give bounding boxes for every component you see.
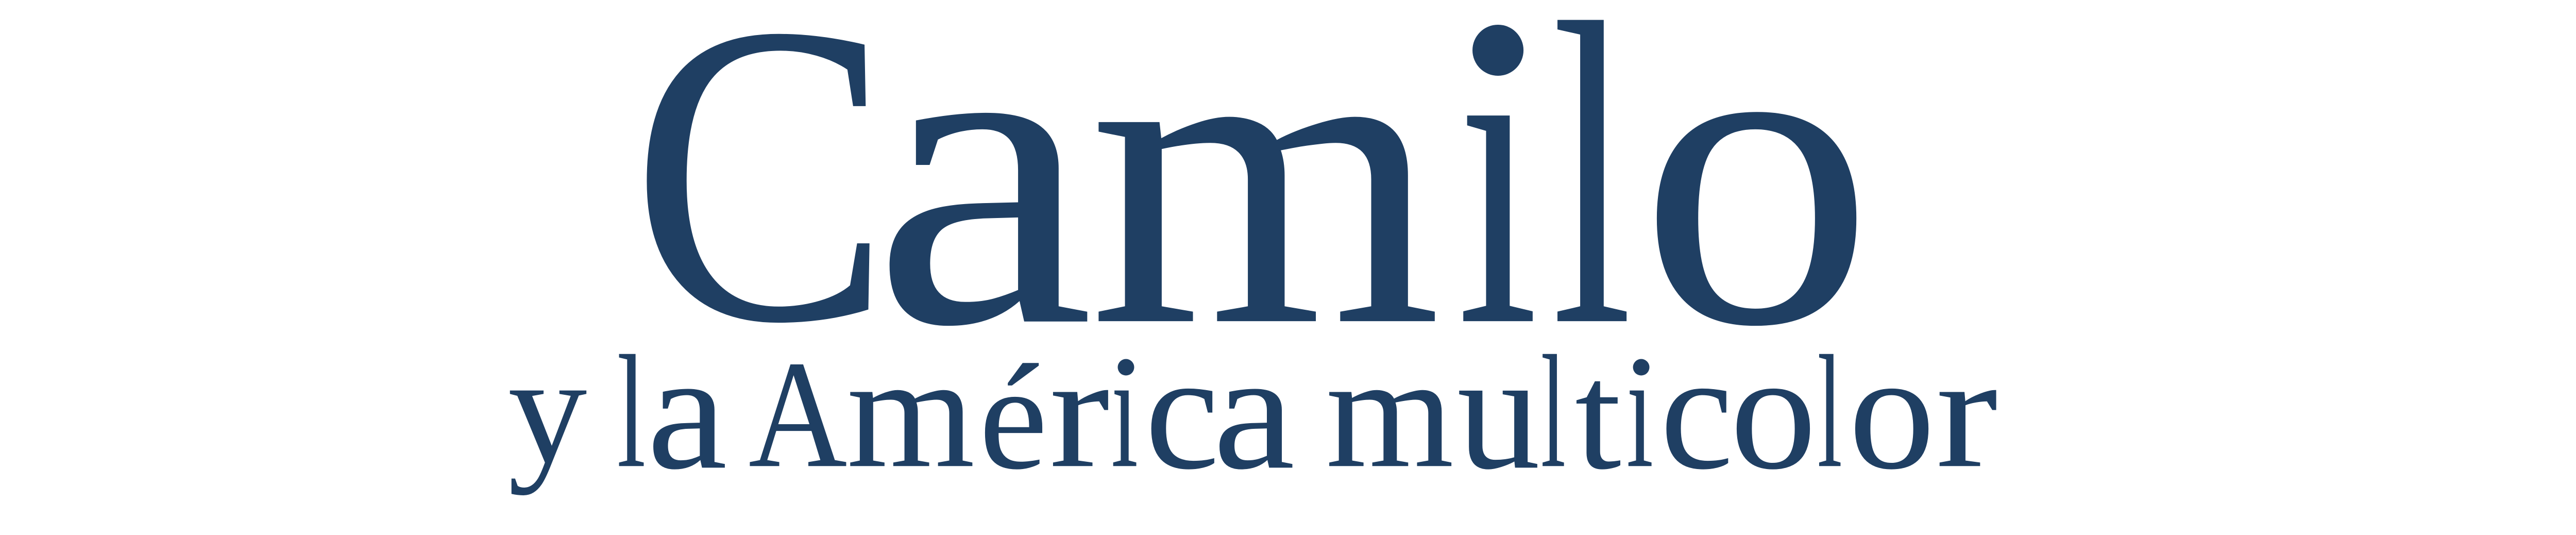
subtitle: y la América multicolor: c <box>1660 318 1733 504</box>
subtitle: y la América multicolor: t <box>1575 331 1622 501</box>
subtitle: y la América multicolor: i <box>1626 319 1653 502</box>
subtitle: y la América multicolor: r <box>1049 322 1110 501</box>
subtitle: y la América multicolor: A <box>749 329 847 500</box>
subtitle: y la América multicolor <box>510 354 1996 495</box>
subtitle: y la América multicolor: l <box>617 322 646 501</box>
subtitle: y la América multicolor: r <box>1936 323 1998 501</box>
subtitle: y la América multicolor: y <box>508 323 587 496</box>
subtitle: y la América multicolor: o <box>1849 318 1935 504</box>
subtitle: y la América multicolor: o <box>1730 318 1817 504</box>
subtitle: y la América multicolor: l <box>1817 322 1842 501</box>
subtitle: y la América multicolor: l <box>1541 322 1566 501</box>
subtitle: y la América multicolor: a <box>1213 319 1295 505</box>
subtitle: y la América multicolor: a <box>647 319 727 505</box>
title: Camilo <box>647 20 1857 326</box>
subtitle: y la América multicolor: c <box>1145 319 1219 504</box>
subtitle: y la América multicolor: m <box>1326 323 1454 501</box>
subtitle: y la América multicolor: i <box>1111 319 1138 502</box>
subtitle: y la América multicolor: m <box>847 323 975 501</box>
subtitle: y la América multicolor: u <box>1457 319 1540 505</box>
subtitle: y la América multicolor: é <box>979 334 1047 501</box>
